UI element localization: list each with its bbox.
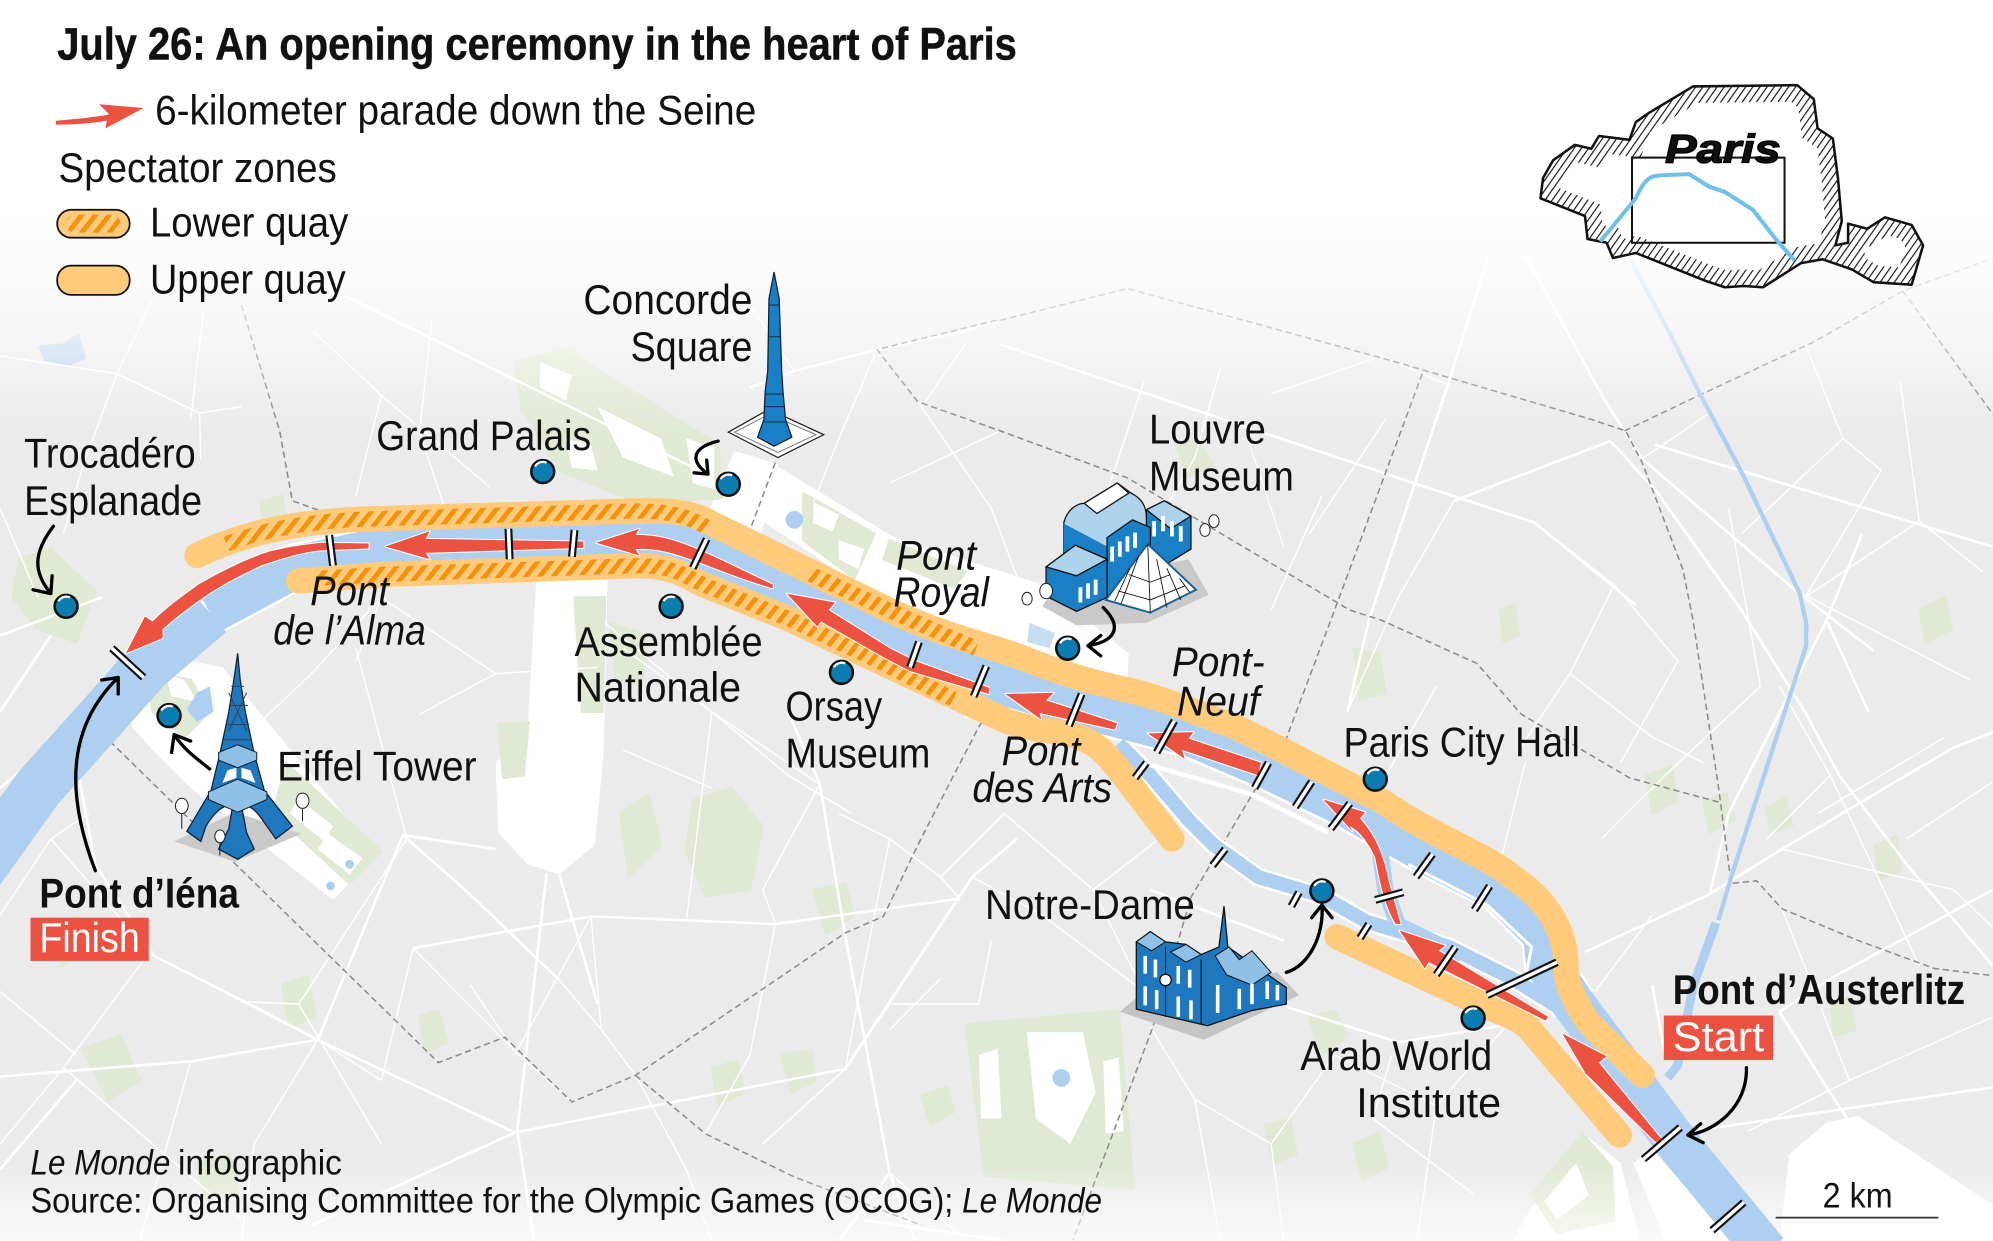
credit line: Le Monde [31, 1142, 170, 1182]
label: Pont de l'Alma: Pont [310, 567, 391, 614]
label: Pont Royal [894, 531, 990, 615]
inset locator map of Paris: Paris [1665, 128, 1781, 172]
canal Saint-Martin [1631, 261, 1806, 920]
label: Assemblée Nationale: Nationale [575, 664, 741, 711]
canal basin [1668, 923, 1716, 1078]
label: Pont des Arts: des Arts [972, 764, 1112, 811]
legend: parade label: 6-kilometer parade down the Seine [155, 87, 756, 134]
label: Concorde Square [583, 276, 752, 370]
leader arrows [33, 441, 1746, 1143]
white page header [0, 0, 1993, 217]
quay: upper quay, south bank east [1337, 937, 1619, 1135]
label: Concorde Square: Square [630, 323, 752, 370]
title: July 26: An opening ceremony in the heart of Paris [57, 19, 1017, 70]
label: Arab World Institute: Arab World [1300, 1032, 1492, 1079]
lower quay: hatched, north bank east [808, 573, 976, 648]
label: Pont-Neuf: Neuf [1177, 678, 1264, 725]
source line: Source: Organising Committee for the Olympic Games (OCOG); [31, 1181, 953, 1221]
label: Paris City Hall: Paris City Hall [1343, 718, 1580, 765]
icon: Notre-Dame [1120, 906, 1299, 1040]
legend: lower quay swatch [57, 210, 130, 238]
badge: Finish: Finish [39, 914, 140, 961]
legend: upper quay label: Upper quay [150, 256, 346, 303]
label: Orsay Museum [786, 683, 930, 777]
bridges [112, 529, 1744, 1230]
label: Pont des Arts: Pont [1002, 727, 1083, 774]
label: Pont de l'Alma [273, 567, 426, 653]
lower quay: hatched, south bank [318, 566, 953, 699]
label: Eiffel Tower: Eiffel Tower [277, 742, 477, 789]
icon: Louvre and pyramid [1022, 483, 1219, 625]
white mottling in the gardens [165, 362, 1589, 1220]
source line: Le Monde [962, 1181, 1102, 1221]
label: Pont-Neuf: Pont- [1172, 638, 1265, 685]
legend: lower quay label: Lower quay [150, 198, 348, 245]
major streets [0, 253, 1993, 1241]
inset locator map of Paris [1541, 85, 1923, 287]
location markers [55, 460, 1485, 1030]
top fade [0, 216, 1993, 432]
lower quay: hatched, north bank west [226, 511, 709, 544]
label: Assemblée Nationale: Assemblée [575, 618, 763, 665]
white zones [99, 451, 1993, 1241]
legend: parade arrow [56, 104, 144, 128]
label: Trocadéro Esplanade [24, 430, 202, 524]
green parks [13, 350, 1952, 1233]
label: Trocadéro Esplanade: Esplanade [24, 477, 202, 524]
label: Notre-Dame: Notre-Dame [985, 881, 1195, 928]
icon: Eiffel Tower [174, 653, 309, 862]
river Seine [0, 540, 1767, 1241]
label: Arab World Institute [1300, 1032, 1501, 1126]
blue garden pools [38, 333, 1070, 1087]
label: Louvre Museum: Museum [1149, 453, 1294, 500]
label: Arab World Institute: Institute [1356, 1079, 1501, 1126]
label: Pont des Arts [972, 727, 1112, 811]
label: Louvre Museum [1149, 406, 1294, 500]
label: Pont d'Iéna: Pont d’Iéna [39, 870, 240, 917]
credit line [31, 1142, 342, 1182]
label: Louvre Museum: Louvre [1149, 406, 1266, 453]
label: Assemblée Nationale [575, 618, 763, 711]
label: Orsay Museum: Orsay [786, 683, 882, 730]
label: Pont Royal: Pont [896, 531, 978, 578]
label: Pont Royal: Royal [894, 568, 990, 615]
label: Grand Palais: Grand Palais [376, 412, 591, 459]
label: Concorde Square: Concorde [583, 276, 752, 323]
label: Pont de l'Alma: de l’Alma [273, 606, 426, 653]
label: Trocadéro Esplanade: Trocadéro [24, 430, 196, 477]
icon: Concorde obelisk [728, 272, 824, 458]
scale bar: 2 km [1823, 1175, 1893, 1215]
parade route arrows [126, 529, 1661, 1143]
quay: upper quay, north bank [197, 511, 1642, 1075]
minor streets [0, 300, 1993, 1241]
legend: upper quay swatch [57, 266, 130, 295]
label: Orsay Museum: Museum [786, 730, 930, 777]
arrondissement boundaries [95, 257, 1993, 1241]
badge: Start: Start [1673, 1013, 1765, 1060]
legend: spectator zones heading: Spectator zones [58, 144, 337, 191]
bottom fade [0, 1163, 1993, 1241]
credit line: infographic [178, 1142, 342, 1182]
quay: upper quay, south bank west [299, 566, 1172, 839]
label: Pont-Neuf [1172, 638, 1265, 725]
